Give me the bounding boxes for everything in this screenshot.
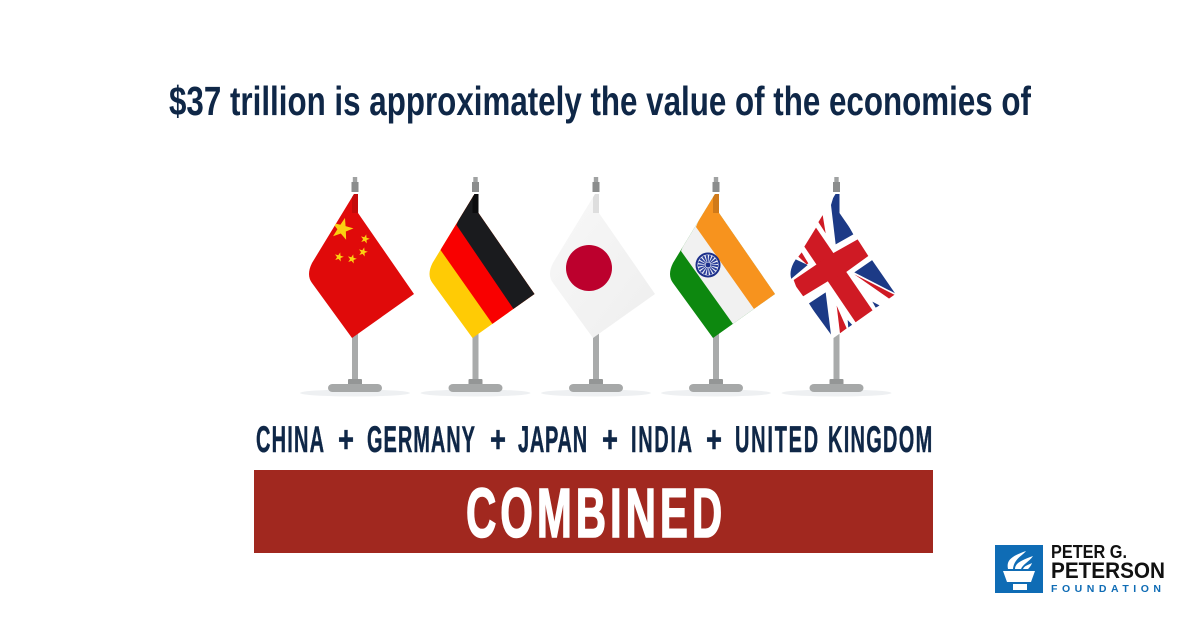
banner: combined: COMBINED <box>466 475 722 553</box>
country list: UNITED <box>735 420 818 461</box>
banner: combined <box>254 470 933 553</box>
logo: Peter G. Peterson Foundation: FOUNDATION <box>1051 583 1161 595</box>
plus sign: + <box>338 419 354 460</box>
country list <box>256 419 932 461</box>
country list: JAPAN <box>518 420 587 461</box>
flag: United Kingdom <box>782 177 902 396</box>
country list: KINGDOM <box>828 420 932 461</box>
logo: Peter G. Peterson Foundation <box>995 542 1165 595</box>
flag: China <box>300 177 420 396</box>
country list: GERMANY <box>367 420 475 461</box>
flag: India <box>661 177 786 396</box>
plus sign: + <box>602 419 618 460</box>
country list: INDIA <box>631 420 692 461</box>
logo: Peter G. Peterson Foundation: PETER G. <box>1051 542 1127 562</box>
icon: torch <box>995 545 1043 593</box>
flag: Germany <box>420 177 546 396</box>
plus sign: + <box>490 419 506 460</box>
country list: CHINA <box>256 420 324 461</box>
logo: Peter G. Peterson Foundation: PETERSON <box>1051 558 1165 583</box>
plus sign: + <box>706 419 722 460</box>
flag: Japan <box>541 177 661 396</box>
icon: Ashoka chakra <box>696 254 720 276</box>
